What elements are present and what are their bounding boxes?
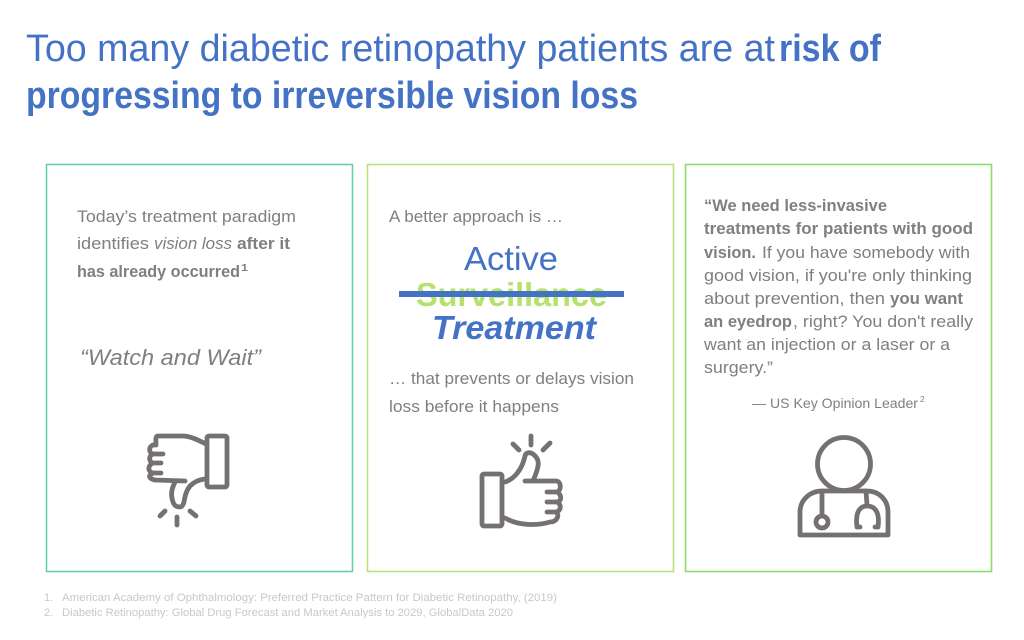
- quote text: surgery.”: [704, 358, 773, 377]
- quote: watch and wait: “Watch and Wait”: [80, 345, 263, 370]
- icon: thumbs down: [149, 436, 227, 525]
- quote text: good vision, if you're only thinking: [704, 266, 972, 285]
- word: active: Active: [464, 240, 558, 277]
- attribution: 2: [920, 394, 925, 404]
- title: [26, 28, 881, 117]
- text: prevents or delays: … that prevents or delays vision: [389, 369, 634, 388]
- word: treatment: Treatment: [432, 309, 598, 346]
- quote text: vision.: [704, 243, 756, 262]
- text block: treatment paradigm: 1: [241, 263, 249, 274]
- quote text: want an injection or a laser or a: [703, 335, 951, 354]
- quote text: about prevention, then: [704, 289, 885, 308]
- quote text: , right? You don't really: [793, 312, 974, 331]
- icon: doctor with stethoscope: [800, 438, 888, 535]
- footnotes: 1.: [44, 592, 53, 604]
- text block: treatment paradigm: after it: [237, 234, 290, 253]
- title: risk of: [779, 28, 881, 70]
- title: Too many diabetic retinopathy patients are at: [26, 28, 775, 70]
- quote text: you want: [890, 289, 963, 308]
- footnotes: 2.: [44, 607, 53, 619]
- footnotes: Diabetic Retinopathy: Global Drug Forecast and Market Analysis to 2029, GlobalData 2020: [62, 607, 513, 619]
- text: prevents or delays: [389, 369, 634, 416]
- quote text: “We need less-invasive: [704, 196, 887, 215]
- icon: thumbs up: [482, 436, 561, 526]
- quote text: treatments for patients with good: [704, 219, 973, 238]
- quote text: [703, 196, 974, 377]
- quote text: If you have somebody with: [762, 243, 970, 262]
- quote text: an eyedrop: [704, 312, 792, 331]
- attribution: — US Key Opinion Leader: [752, 395, 918, 411]
- text: better approach: A better approach is …: [389, 207, 563, 226]
- word: surveillance struck through: Surveillance: [416, 276, 607, 313]
- text block: treatment paradigm: has already occurred: [77, 262, 240, 281]
- footnotes: [44, 592, 557, 619]
- text block: treatment paradigm: Today’s treatment paradigm: [77, 207, 296, 226]
- title: progressing to irreversible vision loss: [26, 75, 638, 117]
- text: prevents or delays: loss before it happens: [389, 397, 559, 416]
- text block: treatment paradigm: identifies: [77, 234, 149, 253]
- panel: active treatment: [368, 164, 674, 572]
- text block: treatment paradigm: vision loss: [154, 234, 232, 253]
- panel: watch and wait: [46, 164, 352, 572]
- panel: opinion leader quote: [686, 164, 992, 572]
- text block: treatment paradigm: [77, 207, 296, 281]
- footnotes: American Academy of Ophthalmology: Preferred Practice Pattern for Diabetic Retinopathy, (2019): [62, 592, 557, 604]
